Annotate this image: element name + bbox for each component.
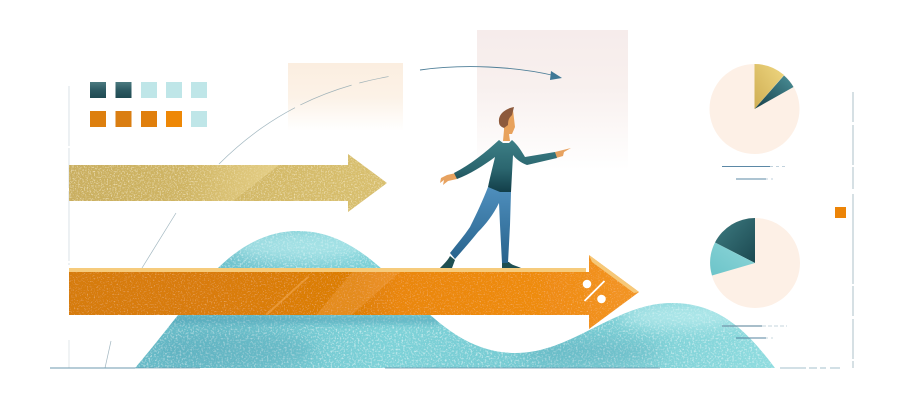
orange arrow bbox=[69, 255, 639, 329]
label lines: top pie bbox=[722, 166, 785, 179]
illustration: person walking on growth arrow with charts bbox=[50, 30, 854, 368]
orange marker square bbox=[835, 207, 846, 218]
label lines: bottom pie bbox=[722, 326, 787, 338]
pie chart: bottom bbox=[710, 218, 800, 308]
neck and face bbox=[503, 110, 515, 141]
pie chart: top bbox=[710, 64, 800, 154]
hills bbox=[135, 230, 775, 370]
back foot bbox=[440, 256, 455, 268]
gold arrow bbox=[69, 154, 387, 212]
baseline bbox=[50, 367, 840, 369]
legs bbox=[450, 187, 511, 263]
legend squares bbox=[90, 82, 207, 127]
frame lines bbox=[69, 86, 853, 368]
right hand bbox=[555, 148, 571, 158]
front foot bbox=[502, 262, 521, 268]
arrow highlight bbox=[69, 268, 586, 272]
person bbox=[440, 107, 571, 268]
hair bbox=[499, 107, 514, 128]
sweater and arms bbox=[454, 140, 557, 192]
growth curve with arrow bbox=[105, 67, 562, 368]
left hand bbox=[440, 173, 457, 185]
icon: percent sign bbox=[583, 280, 606, 303]
background panel: peach bbox=[288, 63, 403, 131]
background panel: pink bbox=[477, 30, 628, 170]
